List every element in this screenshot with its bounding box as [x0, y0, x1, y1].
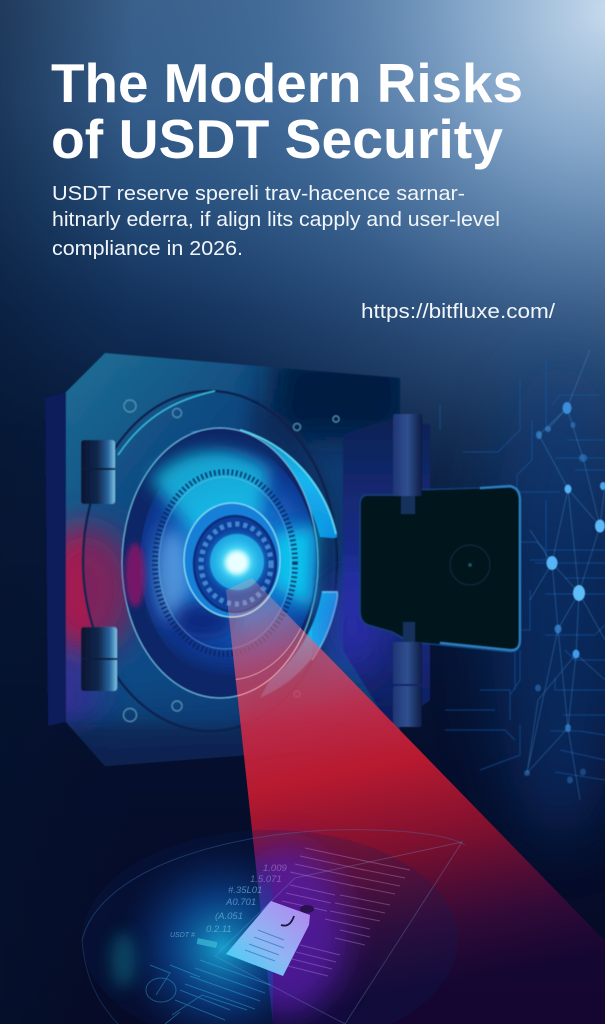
- title: [51, 52, 523, 170]
- door side edge: [45, 392, 66, 726]
- vault door: [44, 352, 400, 766]
- floating numeric readouts: (A.051: [215, 911, 243, 922]
- screws: [124, 400, 339, 722]
- subtitle: [52, 183, 500, 260]
- floating numeric readouts: A0.701: [225, 897, 256, 908]
- dial disc: [122, 428, 318, 698]
- floating numeric readouts: USDT #: [170, 932, 195, 939]
- bright crescent ring: [118, 391, 215, 455]
- floating numeric readouts: 0.2.11: [206, 924, 232, 935]
- red light beam: [226, 578, 605, 1024]
- gear teeth: [155, 472, 295, 654]
- door plate: [66, 353, 400, 766]
- subtitle: compliance in 2026.: [52, 238, 243, 260]
- subtitle: hitnarly ederra, if align lits capply and user-level: [52, 209, 500, 231]
- floating numeric readouts: #.35L01: [228, 885, 262, 896]
- glowing tablet on floor: [82, 830, 465, 1024]
- data lines: [282, 848, 410, 976]
- floating numeric readouts: [170, 863, 287, 939]
- tablet frame: [215, 842, 462, 1024]
- floating numeric readouts: 1.009: [263, 863, 287, 874]
- subtitle: USDT reserve spereli trav-hacence sarnar-: [52, 183, 465, 205]
- outer ring line: [83, 391, 337, 731]
- dark lock window: [360, 487, 520, 652]
- inner dial rings: [184, 503, 280, 617]
- glowing core: [203, 528, 271, 596]
- floating numeric readouts: 1.5.071: [250, 874, 282, 885]
- title: of USDT Security: [51, 108, 503, 170]
- title: The Modern Risks: [51, 52, 523, 114]
- hinges left: [81, 440, 117, 691]
- document icon: [226, 901, 314, 976]
- right door panel: [322, 414, 520, 730]
- right hinge column: [393, 414, 422, 727]
- source url: https://bitfluxe.com/: [361, 301, 555, 323]
- circuit network: [440, 350, 605, 800]
